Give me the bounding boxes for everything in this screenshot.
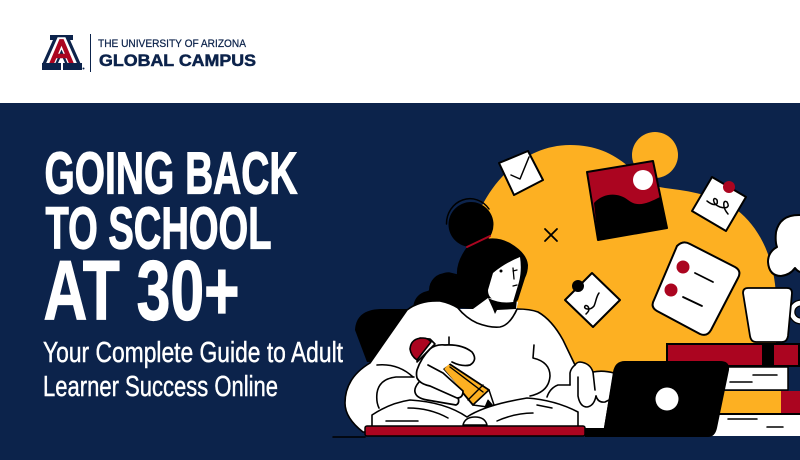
open book (372, 398, 578, 427)
list card (653, 242, 739, 335)
icon: x mark (545, 229, 557, 241)
logo wordmark: GLOBAL CAMPUS (99, 52, 256, 70)
orange background blob (470, 132, 776, 420)
icon: university block A logo (42, 35, 84, 70)
torso and arm (345, 301, 614, 432)
logo wordmark: THE UNIVERSITY OF ARIZONA (98, 38, 247, 50)
face (488, 257, 521, 303)
right hand (570, 365, 611, 407)
subtitle: Learner Success Online (43, 371, 278, 403)
title: TO SCHOOL (46, 196, 272, 262)
sticky note: black pin (565, 273, 620, 327)
note: checkmark (499, 151, 543, 195)
subtitle: Your Complete Guide to Adult (43, 337, 343, 369)
book stack (666, 343, 800, 436)
chair (355, 309, 430, 362)
header band (0, 0, 800, 103)
pencil (410, 338, 495, 408)
subtitle (43, 337, 343, 403)
illustration: student studying (333, 132, 800, 437)
steam cloud (768, 215, 800, 276)
sleeve and elbow lines (377, 337, 570, 408)
hair (413, 199, 528, 309)
logo wordmark (98, 38, 256, 70)
laptop (585, 361, 729, 437)
desk line and red book base (333, 426, 585, 437)
picture card (587, 161, 667, 240)
left hand (415, 345, 475, 405)
title: GOING BACK (44, 140, 298, 206)
title: AT 30+ (44, 244, 239, 338)
sticky note: red pin (692, 177, 746, 231)
coffee cup (743, 288, 800, 342)
neck and chin shadow (458, 298, 518, 332)
title (44, 140, 298, 338)
